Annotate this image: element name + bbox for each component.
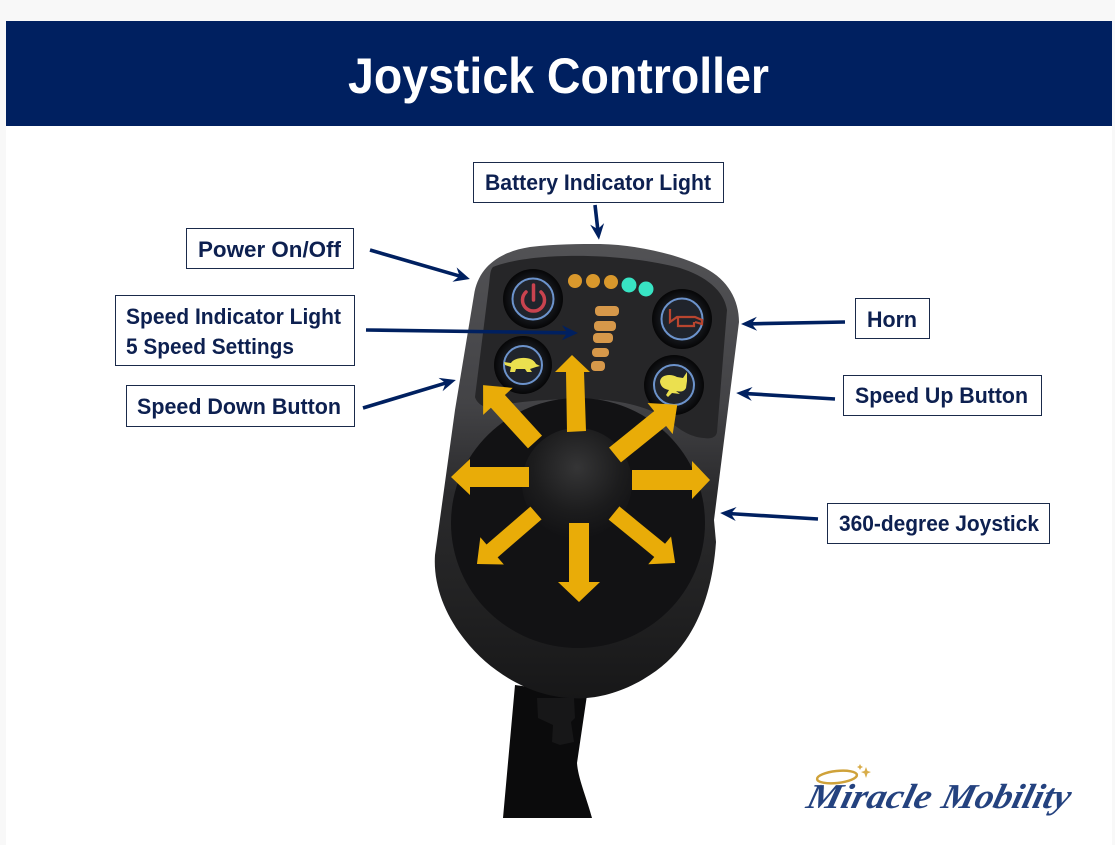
callout: speed indicator light: 5 Speed Settings (126, 334, 294, 359)
arrow: power (368, 243, 472, 286)
turtle speed down button (494, 336, 552, 394)
face panel (475, 256, 727, 438)
arrow: upper left (468, 372, 550, 455)
arrow: horn (741, 315, 845, 331)
logo: miracle mobility (802, 764, 1076, 816)
arrow: lower right (603, 499, 687, 577)
title banner (6, 21, 1112, 126)
callout: battery indicator light (474, 162, 724, 202)
callout: battery indicator light: Battery Indicator Light (485, 170, 712, 195)
cable (503, 685, 592, 818)
pointer arrows (361, 204, 845, 526)
callout: horn (856, 298, 930, 338)
callout: speed down button: Speed Down Button (137, 394, 341, 419)
battery indicator LEDs (568, 274, 654, 296)
joystick controller photo (435, 244, 739, 818)
arrow: lower left (465, 499, 548, 578)
arrow: speed indicator (366, 323, 578, 340)
speed indicator bars (591, 306, 619, 371)
arrow: upper right (602, 389, 690, 471)
callout: 360-degree joystick: 360-degree Joystick (839, 511, 1040, 536)
callout: power on/off (186, 228, 354, 268)
joystick ball (522, 428, 632, 538)
logo wordmark (802, 776, 1076, 816)
rabbit speed up button (644, 355, 704, 415)
arrow: up (555, 355, 590, 432)
arrow: speed up (736, 386, 835, 406)
arrow: down (558, 523, 600, 602)
arrow: left (451, 459, 529, 495)
arrow: right (632, 461, 710, 499)
callout: speed up button (844, 376, 1042, 416)
arrow: joystick (720, 506, 818, 526)
arrow: battery (588, 204, 606, 241)
callout: speed down button (126, 386, 354, 426)
power button (503, 269, 563, 329)
title: Joystick Controller (348, 48, 769, 104)
callout: speed indicator light: Speed Indicator Light (126, 304, 342, 329)
joystick dome (451, 398, 705, 648)
cable strain relief (537, 698, 575, 745)
logo wordmark: Mobility (937, 776, 1076, 816)
logo stars (818, 764, 871, 792)
direction arrows (451, 355, 710, 602)
horn button (652, 289, 712, 349)
callout: speed up button: Speed Up Button (855, 383, 1028, 408)
callout: speed indicator light (116, 296, 354, 366)
callout: horn: Horn (867, 307, 917, 332)
logo halo (816, 769, 858, 785)
logo wordmark: Miracle (802, 776, 937, 816)
controller shell (435, 244, 739, 698)
callout: power on/off: Power On/Off (198, 237, 342, 262)
arrow: speed down (361, 373, 458, 415)
callout: 360-degree joystick (828, 504, 1050, 544)
